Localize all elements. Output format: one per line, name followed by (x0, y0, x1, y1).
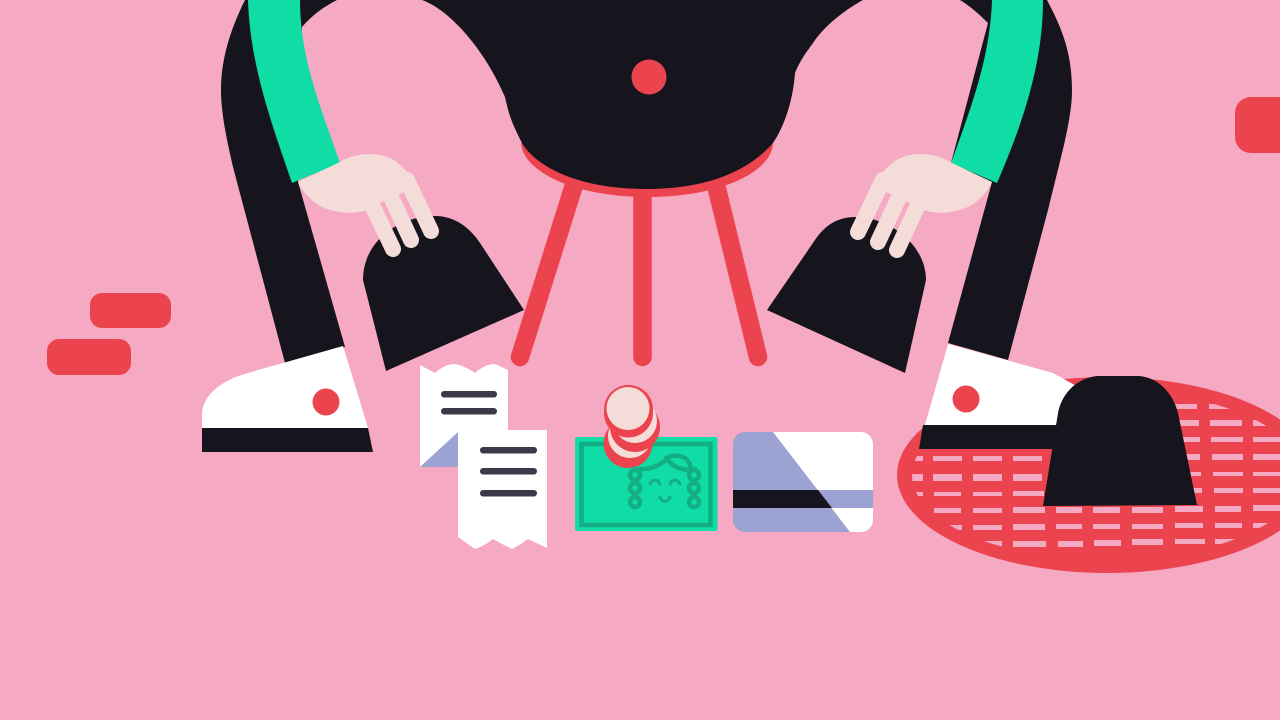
red belly dot (632, 60, 666, 94)
illustration scene (47, 0, 1280, 573)
right knee (767, 217, 926, 373)
stool with three legs (520, 143, 773, 357)
stack of coins (604, 385, 660, 468)
decorative red pills, left (47, 293, 171, 375)
red woven rug (897, 377, 1280, 573)
black boot on rug (1043, 376, 1197, 506)
right hand (858, 154, 992, 250)
left green sleeve (248, 0, 340, 183)
decorative red pill, right (1235, 97, 1280, 153)
green banknote with portrait (575, 437, 718, 531)
left sneaker (202, 346, 373, 452)
right sneaker (919, 344, 1080, 449)
bank card (733, 432, 873, 532)
figure body and legs (221, 0, 1072, 363)
receipt, front (458, 430, 547, 549)
receipt, back (420, 364, 508, 467)
left hand (298, 154, 431, 249)
right green sleeve (951, 0, 1043, 183)
left knee (363, 216, 524, 371)
